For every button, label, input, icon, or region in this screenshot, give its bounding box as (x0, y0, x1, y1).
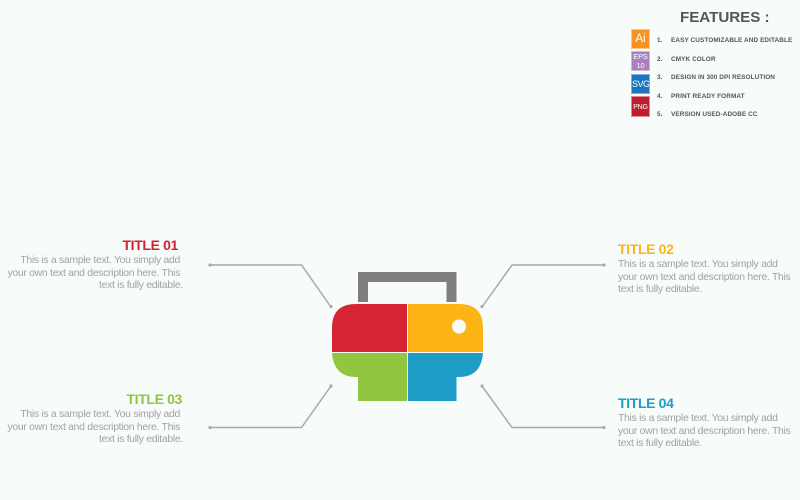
arrow: connector to title 02 (480, 263, 606, 308)
printer segment: green (332, 353, 407, 401)
icon: EPS file format (631, 51, 650, 71)
description 01: your own text and description here. This (8, 268, 180, 278)
feature item 1: EASY CUSTOMIZABLE AND EDITABLE (671, 37, 792, 44)
description 04: text is fully editable. (618, 438, 702, 449)
icon: Ai file format: Ai (635, 33, 646, 45)
description 04 (618, 413, 790, 449)
description 02: This is a sample text. You simply add (618, 259, 778, 270)
feature item 3: DESIGN IN 300 DPI RESOLUTION (671, 74, 775, 81)
feature item 1: 1. (657, 37, 663, 44)
title 02: TITLE 02 (618, 241, 674, 257)
arrow: connector to title 04 (480, 384, 606, 429)
description 01: This is a sample text. You simply add (20, 255, 180, 266)
title 01: TITLE 01 (122, 237, 178, 253)
printer button (452, 320, 466, 334)
description 02 (618, 259, 790, 295)
feature item 3: 3. (657, 74, 663, 81)
arrow: connector to title 03 (208, 384, 333, 429)
feature item 5: 5. (657, 111, 663, 118)
printer segment: yellow (408, 304, 483, 352)
description 03 (8, 409, 183, 445)
icon: SVG file format: SVG (632, 79, 650, 89)
icon: printer (332, 272, 483, 401)
description 01 (8, 255, 183, 291)
icon: PNG file format: PNG (633, 104, 648, 111)
description 01: text is fully editable. (99, 280, 183, 291)
icon: EPS file format: 10 (637, 61, 644, 70)
title 03: TITLE 03 (126, 391, 182, 407)
printer handle (358, 272, 456, 302)
icon: PNG file format (631, 96, 650, 117)
title 04: TITLE 04 (618, 395, 674, 411)
printer segment: red (332, 304, 407, 352)
description 03: text is fully editable. (99, 434, 183, 445)
feature item 2: 2. (657, 56, 663, 63)
icon: EPS file format: EPS (633, 52, 648, 61)
icon: Ai file format (631, 29, 650, 49)
features heading: FEATURES : (680, 9, 770, 26)
description 04: your own text and description here. This (618, 426, 790, 436)
description 02: your own text and description here. This (618, 272, 790, 282)
feature item 4: PRINT READY FORMAT (671, 93, 745, 100)
arrow: connector to title 01 (208, 263, 333, 308)
printer segment: blue (408, 353, 483, 401)
description 03: This is a sample text. You simply add (20, 409, 180, 420)
icon: SVG file format (631, 74, 650, 94)
feature item 5: VERSION USED-ADOBE CC (671, 111, 758, 118)
feature item 2: CMYK COLOR (671, 56, 716, 63)
description 02: text is fully editable. (618, 284, 702, 295)
panel: features (631, 9, 792, 118)
description 04: This is a sample text. You simply add (618, 413, 778, 424)
description 03: your own text and description here. This (8, 422, 180, 432)
feature item 4: 4. (657, 93, 663, 100)
